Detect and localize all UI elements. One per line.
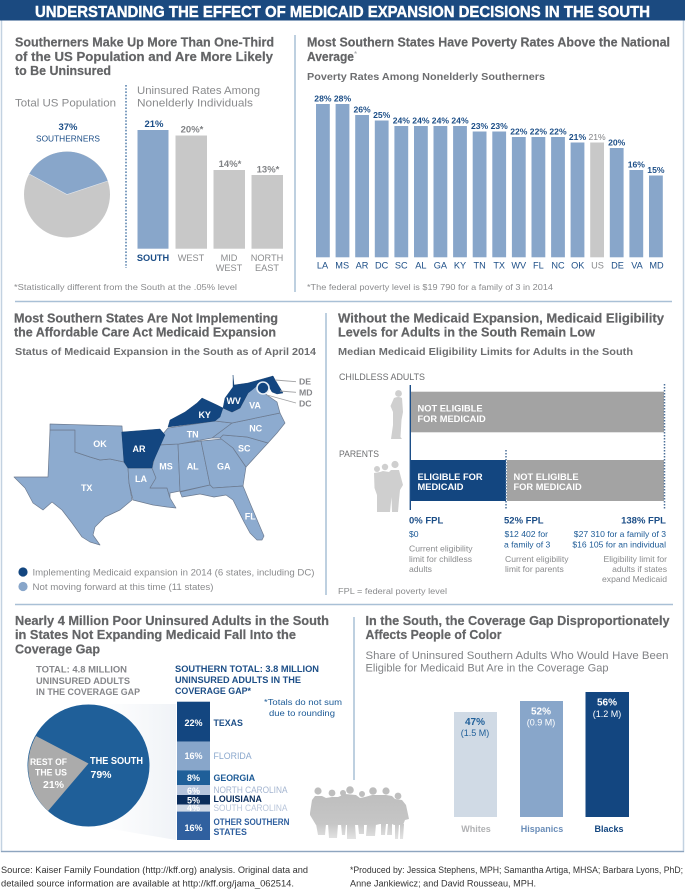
heading: southerners: to Be Uninsured (15, 64, 111, 78)
bar chart: poverty rates by state: 25% (373, 110, 391, 120)
stacked bar: southern coverage gap by state: FLORIDA (214, 751, 252, 761)
heading: coverage gap (15, 614, 329, 656)
label: southern total: SOUTHERN TOTAL: 3.8 MILLION (175, 664, 319, 674)
bar chart: uninsured rates by region (137, 119, 283, 273)
stacked bar: southern coverage gap by state: 16% (184, 751, 203, 761)
stacked bar: southern coverage gap by state (177, 702, 290, 840)
map: southern states: DC (299, 399, 312, 409)
heading: people of color: Affects People of Color (366, 628, 502, 642)
map: southern states: NC (249, 424, 263, 434)
bar chart: poverty rates by state: TN (473, 261, 486, 271)
bar chart: poverty rates by state: 21% (569, 132, 586, 142)
credits: Anne Jankiewicz; and David Rousseau, MPH. (350, 878, 536, 890)
bar chart: poverty rates by state: SC (395, 261, 408, 271)
pie chart: total US population (24, 122, 110, 238)
bar chart: poverty rates by state: 23% (491, 121, 508, 131)
heading: poverty rates: Average (307, 50, 354, 64)
bar chart: poverty rates by state: 22% (530, 126, 547, 136)
annotation: 138% FPL: Eligibility limit for (603, 554, 667, 564)
annotation: 0% FPL: 0% FPL (409, 516, 444, 526)
legend: expansion status: Not moving forward at this time (11 states) (32, 582, 214, 592)
stacked bar: southern coverage gap by state: STATES (214, 827, 247, 837)
bar: parents not eligible: FOR MEDICAID (514, 482, 582, 492)
map: southern states: AL (187, 462, 199, 472)
bar chart: uninsured rates by region: 21% (144, 119, 164, 130)
annotation: 138% FPL: expand Medicaid (602, 574, 667, 584)
annotation: 138% FPL: $27 310 for a family of 3 (574, 529, 666, 539)
stacked bar: southern coverage gap by state: TEXAS (214, 718, 243, 728)
bar chart: poverty rates by state: MS (335, 261, 349, 271)
note: totals do not sum: *Totals do not sum (264, 697, 342, 707)
label: total coverage gap (36, 665, 140, 697)
bar chart: poverty rates by state: FL (533, 261, 544, 271)
bar chart: coverage gap by race: Whites (461, 824, 491, 834)
heading: people of color (366, 614, 670, 642)
bar chart: uninsured rates by region: EAST (255, 263, 279, 273)
map: southern states: LA (135, 474, 147, 484)
bar chart: coverage gap by race: Hispanics (521, 824, 563, 834)
map: southern states (14, 375, 313, 545)
heading: poverty rates (307, 36, 670, 64)
pie chart: total US population: 37% (58, 122, 78, 133)
heading: coverage gap: Coverage Gap (15, 642, 100, 656)
map: southern states: GA (217, 462, 231, 472)
subheading: share of uninsured adults: Eligible for Medicaid But Are in the Coverage Gap (366, 662, 609, 674)
heading: eligibility (338, 312, 664, 340)
bar chart: poverty rates by state: VA (631, 261, 644, 271)
bar chart: poverty rates by state: 24% (393, 116, 410, 126)
map: southern states: MS (159, 462, 173, 472)
annotation: 0% FPL: Current eligibility (409, 544, 473, 554)
bar chart: poverty rates by state: 16% (628, 160, 645, 170)
bar: parents not eligible (507, 460, 664, 501)
stacked bar: southern coverage gap by state: 22% (184, 718, 203, 728)
bar chart: uninsured rates by region: 20%* (181, 124, 204, 136)
annotation: 52% FPL: limit for parents (505, 564, 564, 574)
map: southern states: TX (81, 483, 92, 493)
bar chart: poverty rates by state: 22% (549, 126, 567, 136)
bar chart: poverty rates by state: OK (571, 261, 585, 271)
footnote: federal poverty level: *The federal poverty level is $19 790 for a family of 3 in 2014 (307, 282, 553, 292)
subheading: poverty rates among nonelderly: Poverty Rates Among Nonelderly Southerners (307, 71, 545, 83)
annotation: 52% FPL: $12 402 for (504, 529, 548, 539)
map: southern states: SC (238, 444, 251, 454)
panel: people of color (366, 614, 670, 834)
footnote: statistical difference: *Statistically different from the South at the .05% level (14, 282, 237, 292)
map: southern states: OK (93, 439, 107, 449)
bar chart: poverty rates by state: 24% (451, 116, 469, 126)
subheading: share of uninsured adults (366, 650, 669, 674)
pie chart: coverage gap share: THE SOUTH (90, 756, 143, 767)
stacked bar: southern coverage gap by state: LOUISIANA (214, 794, 263, 804)
annotation: 138% FPL: adults if states (612, 564, 667, 574)
bar chart: poverty rates by state (314, 94, 665, 271)
panel: poverty rates (307, 36, 670, 292)
bar chart: poverty rates by state: LA (317, 261, 329, 271)
label: southern total (175, 664, 319, 696)
stacked bar: southern coverage gap by state: 5% (187, 796, 200, 806)
bar chart: poverty rates by state: 26% (353, 104, 371, 114)
bar: childless adults not eligible: NOT ELIGIBLE (418, 404, 483, 414)
bar: parents eligible: ELIGIBLE FOR (418, 472, 483, 482)
bar chart: poverty rates by state: MD (649, 261, 664, 271)
annotation: 0% FPL: $0 (409, 529, 419, 539)
bar chart: uninsured rates by region: 13%* (257, 164, 280, 176)
bar chart: poverty rates by state: DE (611, 261, 624, 271)
heading: southerners: Southerners Make Up More Than One-Third (15, 36, 274, 50)
annotation: 138% FPL: 138% FPL (621, 516, 666, 526)
bar: parents eligible: MEDICAID (418, 482, 464, 492)
subheading: share of uninsured adults: Share of Uninsured Southern Adults Who Would Have Been (366, 650, 669, 662)
map: southern states: MD (299, 388, 313, 398)
bar chart: poverty rates by state: 15% (647, 165, 665, 175)
bar chart: uninsured rates by region: MID (221, 253, 238, 263)
heading: map panel: the Affordable Care Act Medicaid Expansion (14, 326, 276, 340)
pie chart: coverage gap share: 21% (43, 779, 65, 791)
bar chart: uninsured rates by region: WEST (216, 263, 243, 273)
annotation: 0% FPL: limit for childless (409, 554, 472, 564)
legend: expansion status: Implementing Medicaid expansion in 2014 (6 states, including DC) (32, 568, 314, 578)
stacked bar: southern coverage gap by state: 6% (187, 786, 200, 796)
bar chart: poverty rates by state: US (591, 261, 604, 271)
heading: map panel: Most Southern States Are Not Implementing (14, 312, 278, 326)
stacked bar: southern coverage gap by state: 8% (187, 773, 200, 783)
bar chart: poverty rates by state: WV (511, 261, 527, 271)
label: southern total: COVERAGE GAP* (175, 686, 251, 696)
pie chart: coverage gap share: 79% (90, 769, 112, 781)
annotation: 138% FPL: $16 105 for an individual (572, 540, 666, 550)
heading: southerners (15, 36, 274, 78)
annotation: 0% FPL: adults (409, 564, 432, 574)
bar chart: uninsured rates by region: SOUTH (137, 253, 169, 263)
bar chart: coverage gap by race (454, 692, 629, 834)
bar chart: coverage gap by race: (1.5 M) (461, 728, 489, 738)
stacked bar: southern coverage gap by state: SOUTH CAROLINA (214, 803, 288, 813)
pie chart: total US population: SOUTHERNERS (36, 134, 100, 144)
subheading: total US population: Total US Population (15, 98, 116, 110)
bar chart: poverty rates by state: 28% (314, 94, 332, 104)
label: total coverage gap: TOTAL: 4.8 MILLION (36, 665, 127, 675)
source note: Source: Kaiser Family Foundation (http://kff.org) analysis. Original data and (1, 865, 308, 876)
label: total coverage gap: UNINSURED ADULTS (36, 676, 130, 686)
label: southern total: UNINSURED ADULTS IN THE (175, 675, 301, 685)
annotation: 0% FPL (409, 516, 473, 574)
bar chart: coverage gap by race: Blacks (594, 824, 624, 834)
stacked bar: southern coverage gap by state: 4% (187, 803, 200, 813)
bar chart: poverty rates by state: 20% (608, 138, 626, 148)
label: parents: PARENTS (339, 449, 379, 459)
bar chart: poverty rates by state: 22% (510, 126, 528, 136)
stacked bar: southern coverage gap by state: 16% (184, 823, 203, 833)
annotation: 52% FPL (504, 516, 569, 574)
note: totals do not sum (264, 697, 342, 718)
stacked bar: southern coverage gap by state: OTHER SOUTHERN (214, 817, 290, 827)
legend: expansion status (18, 567, 315, 592)
heading: coverage gap: Nearly 4 Million Poor Uninsured Adults in the South (15, 614, 329, 628)
stacked bar: southern coverage gap by state: GEORGIA (214, 773, 256, 783)
panel: coverage gap breakdown (15, 614, 342, 840)
map: southern states: VA (249, 401, 261, 411)
heading: poverty rates: Most Southern States Have Poverty Rates Above the National (307, 36, 670, 50)
heading: people of color: In the South, the Coverage Gap Disproportionately (366, 614, 670, 628)
bar chart: poverty rates by state: 23% (471, 121, 489, 131)
bar: parents eligible (411, 460, 506, 501)
heading: poverty rates: * (354, 50, 357, 59)
title banner: UNDERSTANDING THE EFFECT OF MEDICAID EXPANSION DECISIONS IN THE SOUTH (35, 4, 650, 21)
bar: childless adults not eligible (411, 392, 664, 432)
heading: coverage gap: in States Not Expanding Medicaid Fall Into the (15, 628, 296, 642)
icon: single adult silhouette (390, 390, 403, 439)
source note: detailed source information are available at http://kff.org/jama_062514. (1, 878, 294, 890)
source note (1, 865, 308, 890)
bar chart: poverty rates by state: 24% (412, 116, 430, 126)
credits (350, 865, 683, 890)
footnote: FPL definition: FPL = federal poverty level (338, 586, 447, 596)
icon: crowd silhouette (310, 786, 409, 839)
bar chart: uninsured rates by region: WEST (178, 253, 205, 263)
bar chart: coverage gap by race: 52% (531, 706, 551, 718)
bar chart: poverty rates by state: NC (551, 261, 565, 271)
panel: southerners share of population and uninsured rates (14, 36, 283, 292)
annotation: 138% FPL (572, 516, 667, 584)
annotation: 52% FPL: 52% FPL (504, 516, 544, 526)
bar chart: coverage gap by race: 56% (597, 698, 617, 708)
annotation: 52% FPL: Current eligibility (505, 554, 569, 564)
label: childless adults: CHILDLESS ADULTS (339, 372, 425, 382)
pie chart: coverage gap share: THE US (35, 768, 67, 778)
pie chart: coverage gap share: REST OF (30, 757, 67, 768)
pie chart: coverage gap share (28, 704, 150, 826)
stacked bar: southern coverage gap by state: NORTH CAROLINA (214, 785, 288, 795)
icon: parents silhouette (374, 461, 403, 512)
bar chart: poverty rates by state: KY (454, 261, 466, 271)
heading: map panel (14, 312, 278, 340)
annotation: 52% FPL: a family of 3 (504, 540, 551, 550)
map: southern states: TN (187, 430, 199, 440)
bar: parents not eligible: NOT ELIGIBLE (514, 472, 579, 482)
map: southern states: AR (132, 444, 146, 454)
bar chart: coverage gap by race: 47% (465, 717, 485, 728)
bar chart: poverty rates by state: 21% (588, 132, 606, 142)
map: southern states: KY (198, 410, 211, 420)
subheading: status of expansion: Status of Medicaid Expansion in the South as of April 2014 (15, 346, 316, 358)
bar chart: coverage gap by race: (1.2 M) (593, 709, 621, 719)
panel: eligibility limits (338, 312, 667, 596)
bar chart: coverage gap by race: (0.9 M) (527, 718, 555, 728)
subheading: median eligibility limits: Median Medicaid Eligibility Limits for Adults in the South (338, 346, 633, 358)
bar chart: poverty rates by state: AR (356, 261, 369, 271)
subheading: uninsured rates: Nonelderly Individuals (137, 98, 254, 110)
note: totals do not sum: due to rounding (269, 708, 335, 718)
bar chart: poverty rates by state: TX (493, 261, 505, 271)
bar chart: uninsured rates by region: NORTH (251, 253, 283, 263)
bar chart: poverty rates by state: 28% (334, 94, 351, 104)
subheading: uninsured rates (137, 85, 260, 110)
bar chart: uninsured rates by region: 14%* (219, 159, 242, 170)
bar chart: poverty rates by state: GA (434, 261, 448, 271)
map: southern states: DE (299, 377, 311, 387)
label: total coverage gap: IN THE COVERAGE GAP (36, 687, 140, 697)
heading: eligibility: Levels for Adults in the South Remain Low (338, 326, 595, 340)
bar chart: poverty rates by state: AL (415, 261, 427, 271)
heading: southerners: of the US Population and Are More Likely (15, 50, 273, 64)
map: southern states: FL (245, 512, 256, 522)
bar: childless adults not eligible: FOR MEDICAID (418, 414, 486, 424)
map: southern states: WV (226, 396, 241, 406)
bar chart: poverty rates by state: DC (375, 261, 389, 271)
panel: medicaid expansion map (14, 312, 316, 592)
heading: eligibility: Without the Medicaid Expansion, Medicaid Eligibility (338, 312, 664, 326)
subheading: uninsured rates: Uninsured Rates Among (137, 85, 260, 97)
bar chart: poverty rates by state: 24% (432, 116, 449, 126)
